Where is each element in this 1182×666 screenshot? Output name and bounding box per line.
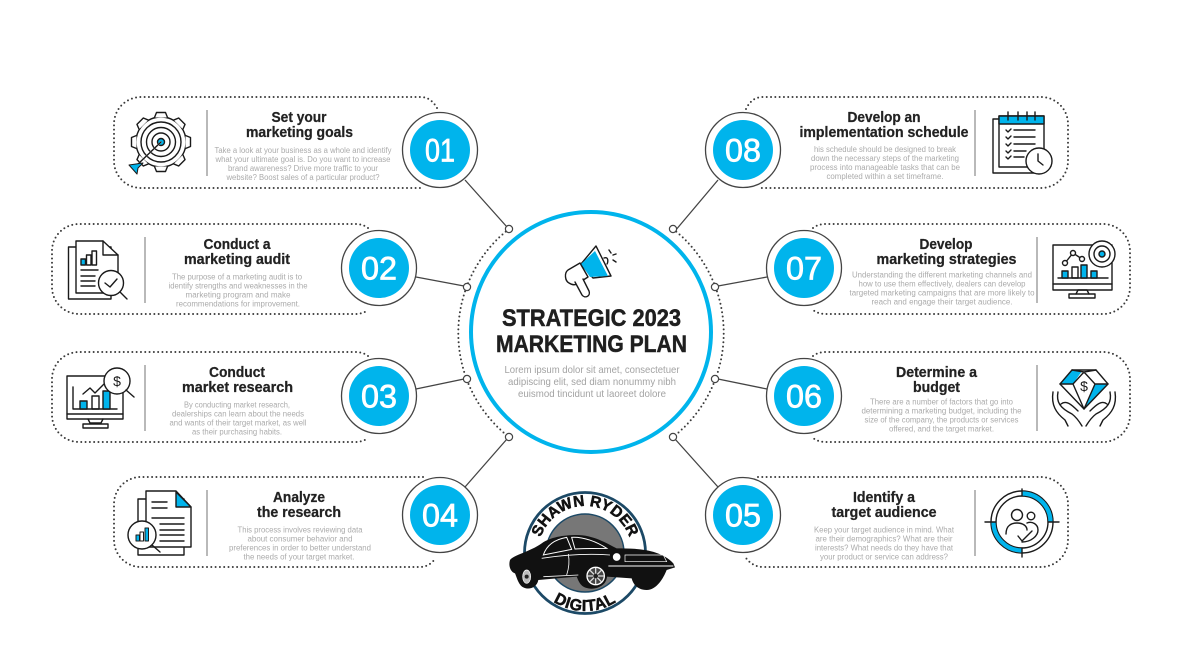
heading (184, 237, 290, 268)
pill outline (813, 352, 1130, 442)
body text: marketing program and make (186, 290, 291, 300)
body text: determining a marketing budget, including the (862, 406, 1022, 416)
heading (800, 110, 968, 141)
body text: Keep your target audience in mind. What (814, 526, 955, 534)
body text: what your ultimate goal is. Do you want to increase (215, 155, 391, 164)
number badge (766, 230, 842, 306)
title (496, 305, 687, 358)
logo ring (524, 492, 646, 614)
icon: monitor with chart (67, 368, 134, 428)
body text: offered, and the target market. (889, 424, 994, 434)
pill outline (52, 224, 368, 314)
divider (1036, 365, 1038, 431)
icon: gear target (129, 112, 190, 174)
divider (206, 490, 208, 556)
pill outline (114, 97, 437, 188)
panel: 04 analyze the research (114, 477, 478, 567)
heading: Develop an (848, 110, 920, 126)
logo text top: SHAWN RYDER (532, 494, 638, 538)
heading (876, 237, 1016, 268)
panel: 01 set your marketing goals (114, 97, 478, 188)
body text (810, 145, 961, 181)
panel: 06 determine a budget (766, 352, 1130, 442)
icon label: dollar: $ (113, 373, 121, 389)
logo: Shawn Ryder Digital (509, 491, 675, 615)
body text: down the necessary steps of the marketing (811, 154, 959, 163)
heading: marketing strategies (876, 252, 1016, 268)
icon: megaphone (565, 246, 616, 297)
body text: completed within a set timeframe. (826, 172, 944, 181)
number badge (342, 230, 416, 306)
heading: Develop (920, 237, 973, 253)
heading (257, 490, 341, 521)
body text: There are a number of factors that go into (870, 398, 1014, 406)
heading: implementation schedule (800, 125, 968, 141)
heading: marketing goals (246, 125, 353, 141)
icon: audit document (68, 241, 127, 299)
pill outline (813, 224, 1130, 314)
divider (974, 490, 976, 556)
number badge: 04 (422, 498, 458, 534)
number badge: 05 (725, 498, 761, 534)
panel: 05 identify a target audience (706, 477, 1068, 567)
divider (144, 237, 146, 303)
heading: budget (913, 380, 960, 396)
heading: Conduct (209, 365, 265, 381)
icon: report with magnifier (128, 491, 191, 555)
icon: calendar checklist (993, 112, 1052, 174)
heading: Identify a (853, 490, 916, 506)
body text: his schedule should be designed to break (814, 145, 957, 154)
title: STRATEGIC 2023 (502, 305, 681, 332)
number badge (402, 478, 478, 552)
body text: identify strengths and weaknesses in the (168, 282, 308, 290)
pill outline (746, 97, 1068, 188)
heading (182, 365, 293, 396)
body text: Understanding the different marketing channels and (852, 270, 1032, 280)
number badge: 03 (361, 378, 397, 414)
pill outline (52, 352, 368, 442)
number badge (706, 478, 780, 552)
heading (246, 110, 353, 141)
body text (214, 146, 392, 182)
number badge: 07 (786, 250, 822, 286)
divider (144, 365, 146, 431)
body text: brand awareness? Drive more traffic to your (228, 164, 378, 173)
body text: By conducting market research, (184, 400, 290, 410)
number badge (342, 358, 416, 434)
icon: monitor with target (1053, 241, 1115, 298)
body text: website? Boost sales of a particular product? (226, 173, 380, 182)
body text: process into manageable tasks that can be (810, 163, 961, 172)
icon: diamond in hands (1053, 370, 1115, 426)
hub description: Lorem ipsum dolor sit amet, consectetuer (504, 364, 680, 376)
number badge: 02 (361, 250, 397, 286)
body text (862, 398, 1022, 434)
heading: Determine a (896, 365, 978, 381)
body text: about consumer behavior and (248, 534, 352, 544)
connector lines and nodes (416, 180, 767, 487)
body text: dealerships can learn about the needs (172, 410, 304, 418)
title: MARKETING PLAN (496, 331, 687, 358)
body text: interests? What needs do they have that (815, 544, 954, 552)
panel: 02 conduct a marketing audit (52, 224, 416, 314)
heading: marketing audit (184, 252, 290, 268)
body text: and wants of their target market, as well (170, 418, 307, 428)
heading: market research (182, 380, 293, 396)
heading: target audience (832, 505, 936, 521)
body text (170, 400, 307, 436)
pill outline (114, 477, 436, 567)
body text: This process involves reviewing data (238, 526, 363, 534)
panel: 03 conduct market research (52, 352, 416, 442)
heading: the research (257, 505, 341, 521)
body text (168, 272, 308, 308)
logo text bottom: DIGITAL (554, 592, 616, 612)
body text: The purpose of a marketing audit is to (172, 272, 303, 282)
heading: Conduct a (204, 237, 271, 253)
icon: audience target (985, 489, 1059, 557)
icon label: dollar: $ (1080, 378, 1088, 394)
body text (814, 526, 955, 562)
body text: the needs of your target market. (244, 552, 354, 562)
body text: reach and engage their target audience. (872, 298, 1012, 306)
heading: Set your (272, 110, 327, 126)
number badge: 06 (786, 378, 822, 414)
body text: Take a look at your business as a whole and identify (214, 146, 392, 155)
body text: size of the company, the products or services (864, 416, 1018, 424)
body text: your product or service can address? (820, 552, 949, 562)
body text: preferences in order to better understand (229, 544, 371, 552)
heading: Analyze (273, 490, 325, 506)
hub description: adipiscing elit, sed diam nonummy nibh (508, 376, 676, 388)
number badge (766, 358, 842, 434)
heading (832, 490, 936, 521)
number badge: 01 (425, 132, 455, 168)
divider (974, 110, 976, 176)
body text (850, 270, 1035, 306)
heading (896, 365, 978, 396)
body text: as their purchasing habits. (192, 428, 282, 436)
hub circle (471, 212, 711, 452)
number badge (402, 112, 478, 188)
body text (229, 526, 371, 562)
panel: 07 develop marketing strategies (766, 224, 1130, 314)
body text: how to use them effectively, dealers can develop (858, 280, 1026, 288)
hub description: euismod tincidunt ut laoreet dolore (518, 388, 666, 400)
pill outline (746, 477, 1068, 567)
number badge (706, 112, 780, 188)
number badge: 08 (725, 132, 761, 168)
central hub (471, 212, 711, 452)
body text: targeted marketing campaigns that are more likely to (850, 288, 1035, 298)
divider (1036, 237, 1038, 303)
hub description (504, 364, 680, 400)
divider (206, 110, 208, 176)
panel: 08 develop an implementation schedule (706, 97, 1068, 188)
logo car (509, 535, 675, 590)
logo inner disc (546, 514, 624, 592)
body text: are their demographics? What are their (816, 534, 953, 544)
body text: recommendations for improvement. (176, 300, 300, 308)
